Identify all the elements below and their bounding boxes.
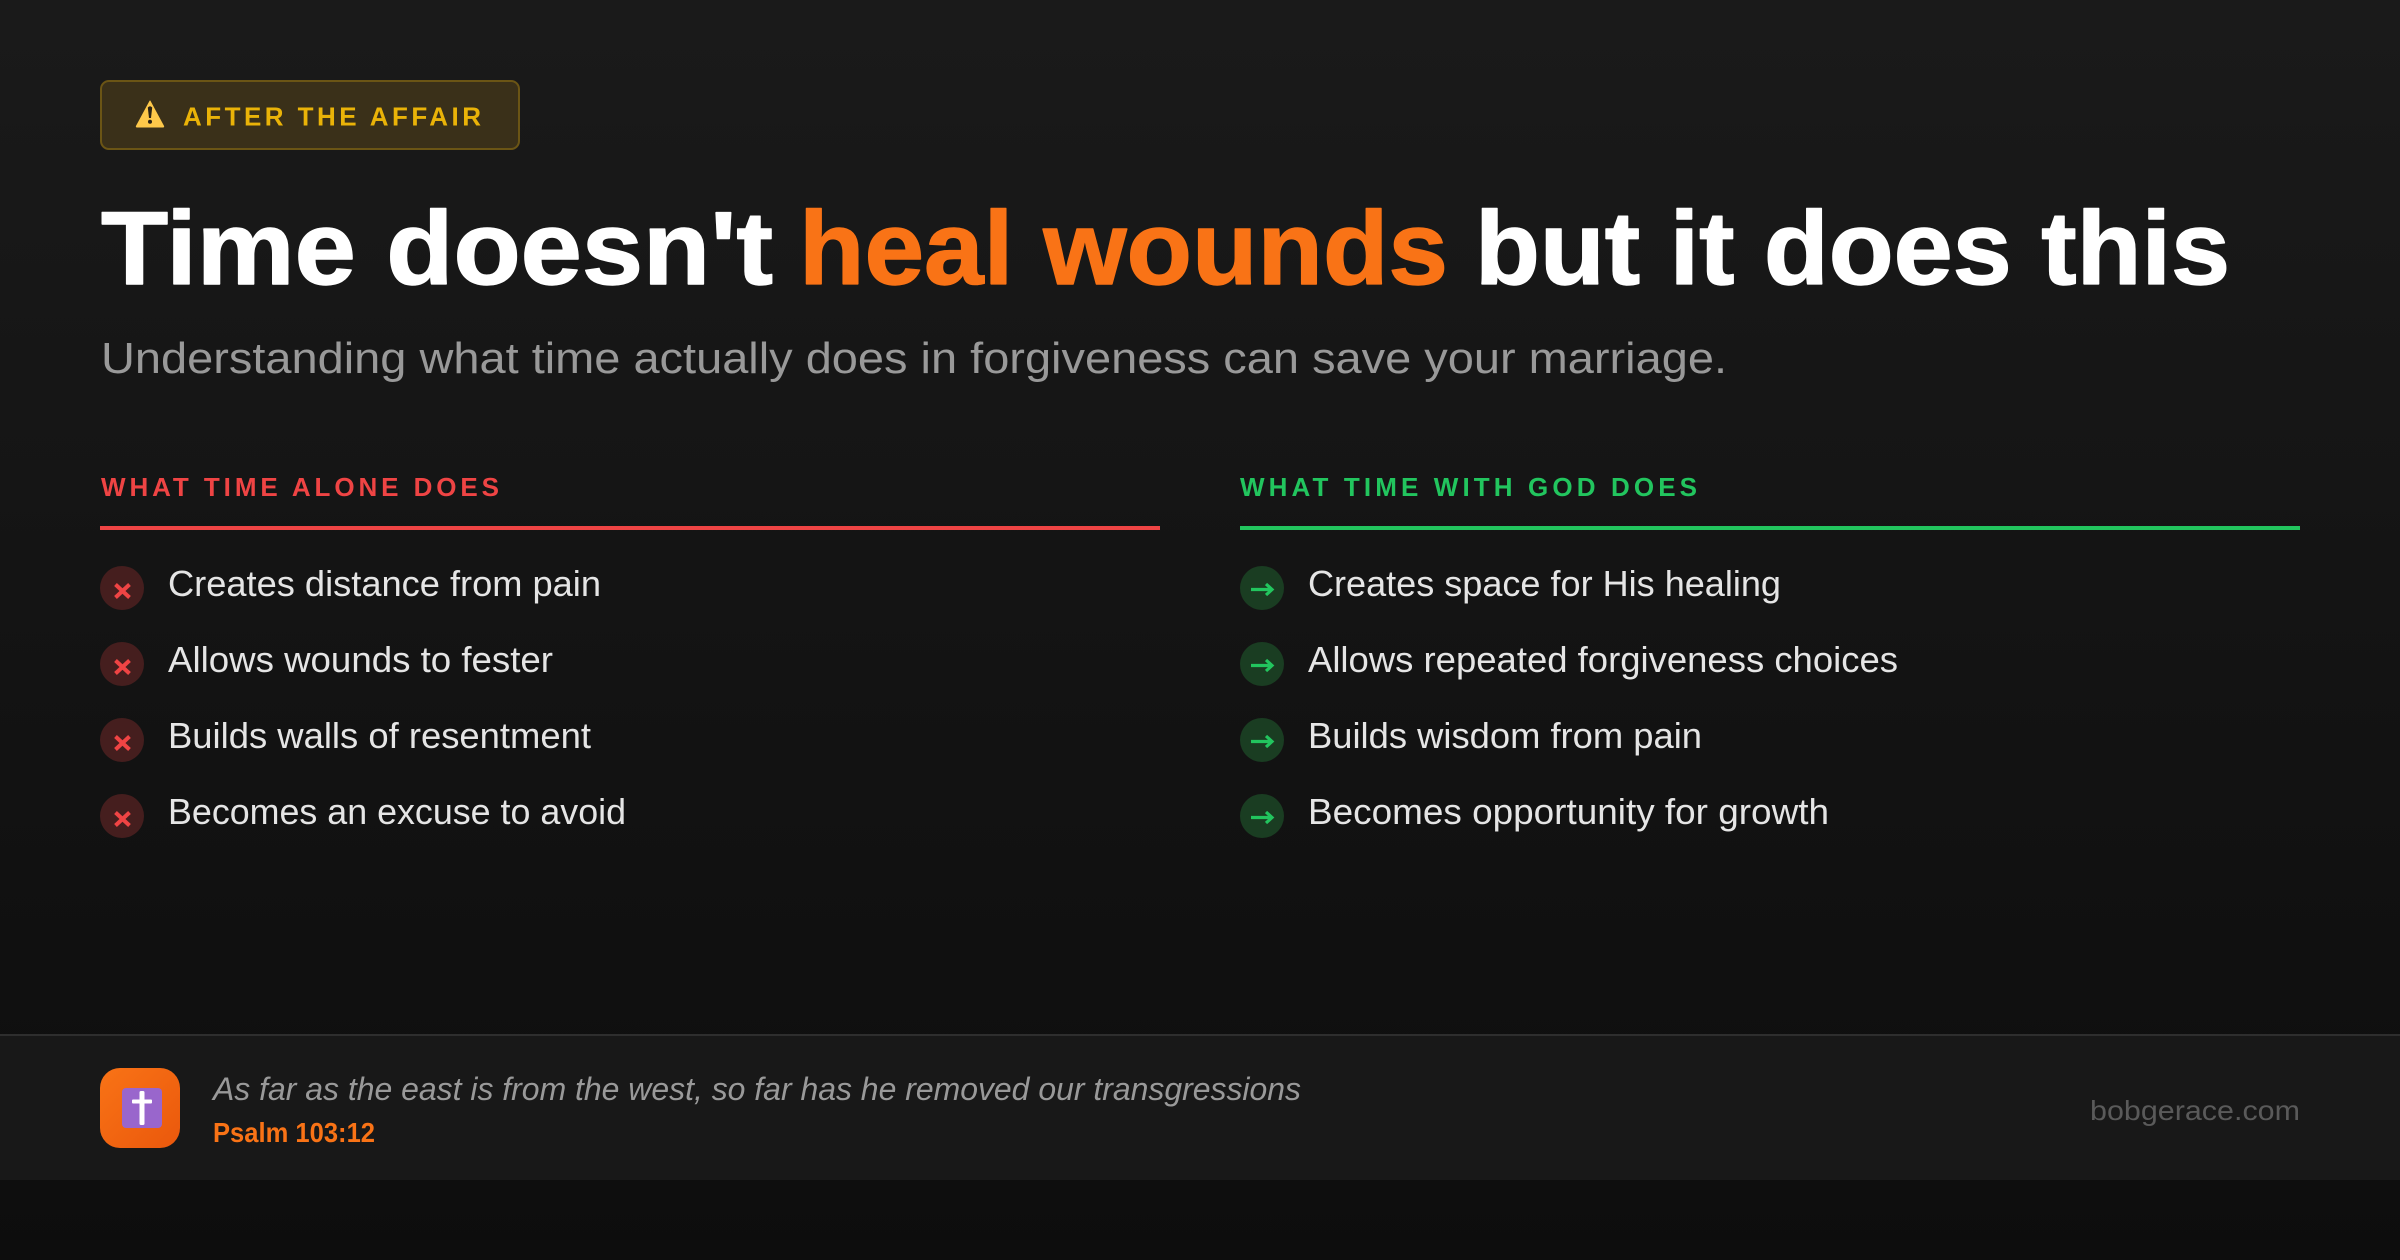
title xyxy=(101,191,2230,307)
item: allows repeated forgiveness choices: Allows repeated forgiveness choices xyxy=(1308,639,1898,680)
item: becomes opportunity for growth: Becomes opportunity for growth xyxy=(1308,791,1829,832)
subtitle: Understanding what time actually does in forgiveness can save your marriage. xyxy=(101,334,1727,383)
item: builds wisdom from pain: Builds wisdom from pain xyxy=(1308,715,1702,756)
item: becomes an excuse to avoid: Becomes an excuse to avoid xyxy=(168,791,626,832)
title: but it does this xyxy=(1475,191,2230,307)
scripture reference: Psalm 103:12 xyxy=(213,1117,375,1148)
panel: what time with god does xyxy=(1240,472,2300,838)
footer bar xyxy=(0,1034,2400,1180)
item: creates space for his healing: Creates space for His healing xyxy=(1308,563,1781,604)
panel: what time alone does xyxy=(100,472,1160,838)
title: Time doesn't xyxy=(101,191,773,307)
heading: what time alone does: WHAT TIME ALONE DOES xyxy=(101,472,499,502)
title: heal wounds xyxy=(799,191,1448,307)
badge label: AFTER THE AFFAIR xyxy=(183,102,481,132)
item: allows wounds to fester: Allows wounds to fester xyxy=(168,639,553,680)
scripture quote: As far as the east is from the west, so far has he removed our transgressions xyxy=(211,1071,1301,1107)
website: bobgerace.com xyxy=(2090,1095,2300,1126)
item: creates distance from pain: Creates distance from pain xyxy=(168,563,601,604)
icon: warning triangle xyxy=(136,101,164,127)
heading: what time with god does: WHAT TIME WITH GOD DOES xyxy=(1240,472,1697,502)
badge: after the affair xyxy=(101,81,519,149)
icon: cross xyxy=(100,1068,180,1148)
item: builds walls of resentment: Builds walls of resentment xyxy=(168,715,591,756)
